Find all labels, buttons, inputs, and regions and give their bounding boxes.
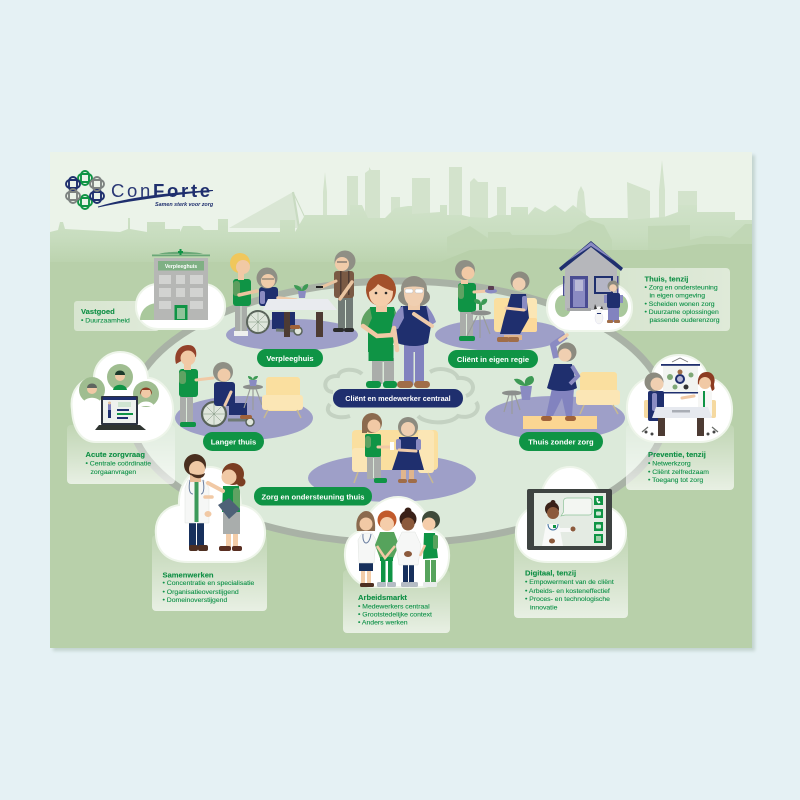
label: Langer thuis xyxy=(203,432,264,451)
Arbeidsmarkt heading: Arbeidsmarkt xyxy=(358,593,407,602)
icon: laptop xyxy=(95,396,146,430)
Arbeidsmarkt list: • Grootstedelijke context xyxy=(358,612,432,618)
Digitaal heading: Digitaal, tenzij xyxy=(525,568,576,578)
panel: Preventie, tenzij xyxy=(626,355,734,490)
scene: Cliënt in eigen regie xyxy=(455,260,537,342)
Vastgoed list: • Duurzaamheid xyxy=(81,318,130,324)
poster sky xyxy=(50,152,752,648)
Preventie cloud xyxy=(627,355,732,442)
icon: presentation screen xyxy=(661,358,700,394)
label: Cliënt en medewerker centraal: Cliënt en medewerker centraal xyxy=(345,394,451,403)
Samenwerken list xyxy=(162,580,254,604)
Acute list: • Centrale coördinatie xyxy=(86,460,151,468)
icon: nursing home building xyxy=(152,249,210,320)
disc: Verpleeghuis xyxy=(226,319,358,351)
man standing xyxy=(316,250,356,332)
panel: Vastgoed xyxy=(74,249,225,331)
Samenwerken heading: Samenwerken xyxy=(162,570,214,580)
Preventie card xyxy=(626,425,734,490)
label: Thuis zonder zorg: Thuis zonder zorg xyxy=(528,437,594,446)
Acute list: zorgaanvragen xyxy=(90,469,136,476)
background clouds xyxy=(325,369,478,422)
Arbeidsmarkt list: • Anders werken xyxy=(358,620,408,626)
Digitaal cloud xyxy=(516,467,626,562)
Digitaal list: • Proces- en technologische xyxy=(525,596,610,603)
person exercising xyxy=(541,335,578,421)
carer xyxy=(362,413,394,483)
Preventie list: • Netwerkzorg xyxy=(648,460,691,468)
speech bubble xyxy=(561,498,592,516)
resident with dog xyxy=(594,280,623,324)
Acute heading: Acute zorgvraag xyxy=(86,450,145,459)
nurse with folder xyxy=(208,463,246,551)
label: Verpleeghuis xyxy=(257,349,323,367)
label: Verpleeghuis: Verpleeghuis xyxy=(266,354,314,363)
label: Zorg en ondersteuning thuis xyxy=(254,487,372,506)
call icons xyxy=(594,496,603,543)
Arbeidsmarkt list: • Medewerkers centraal xyxy=(358,604,430,610)
Thuis list: • Zorg en ondersteuning xyxy=(644,284,718,292)
scene: Verpleeghuis xyxy=(230,250,356,337)
client in wheelchair xyxy=(202,362,254,426)
Vastgoed card xyxy=(74,301,159,331)
Digitaal list: • Arbeids- en kosteneffectief xyxy=(525,588,610,595)
Thuis list: in eigen omgeving xyxy=(650,292,705,300)
Samenwerken card xyxy=(152,535,267,611)
logo xyxy=(66,171,214,209)
doctor with dark skin xyxy=(396,508,421,587)
scene: Langer thuis xyxy=(175,345,303,427)
central circular path xyxy=(130,281,666,543)
yellow sofa xyxy=(352,430,438,483)
label: Langer thuis: Langer thuis xyxy=(211,437,256,446)
label: Thuis zonder zorg xyxy=(519,432,603,451)
Arbeidsmarkt card xyxy=(343,570,450,633)
table with plant xyxy=(263,284,337,337)
Thuis cloud xyxy=(547,284,632,331)
seated client xyxy=(497,272,530,342)
panel: Acute zorgvraag xyxy=(67,352,175,484)
Thuis list: • Duurzame oplossingen xyxy=(644,309,719,316)
doctor xyxy=(184,454,212,551)
four care workers xyxy=(356,508,440,587)
scene: Zorg en ondersteuning thuis xyxy=(352,413,438,483)
label: Cliënt in eigen regie: Cliënt in eigen regie xyxy=(457,355,529,364)
Preventie list xyxy=(648,460,709,484)
Digitaal list xyxy=(525,579,614,612)
icon: house xyxy=(555,241,628,317)
Samenwerken list: • Organisatieoverstijgend xyxy=(162,589,239,596)
Thuis list: passende ouderenzorg xyxy=(650,317,720,324)
carer with red hair xyxy=(375,510,399,587)
logo mark xyxy=(66,171,104,209)
logo swoosh xyxy=(98,190,213,207)
disc: Langer thuis xyxy=(175,396,313,440)
carer with blond hair xyxy=(230,253,257,336)
Thuis list xyxy=(644,284,720,324)
label: Cliënt in eigen regie xyxy=(448,350,538,368)
yellow armchair xyxy=(494,298,537,332)
scene: Thuis zonder zorg xyxy=(502,335,620,429)
doctor with brown hair xyxy=(356,511,376,587)
logo wordmark: ConForte xyxy=(111,180,213,201)
carer: auburn hair xyxy=(361,274,402,388)
Acute list xyxy=(86,460,151,476)
panel: Samenwerken xyxy=(152,454,267,611)
Preventie heading: Preventie, tenzij xyxy=(648,450,706,459)
Digitaal list: innovatie xyxy=(530,604,558,612)
logo tagline: Samen sterk voor zorg xyxy=(155,202,214,208)
yellow armchair xyxy=(262,377,303,418)
Arbeidsmarkt cloud xyxy=(345,497,449,587)
Thuis heading: Thuis, tenzij xyxy=(644,274,688,284)
skyline xyxy=(50,160,752,648)
Acute cloud xyxy=(72,352,173,442)
disc: Cliënt in eigen regie xyxy=(435,319,565,351)
label: Zorg en ondersteuning thuis: Zorg en ondersteuning thuis xyxy=(262,492,364,501)
meeting table with two people xyxy=(642,372,718,436)
poster shadow xyxy=(53,155,755,651)
panel: Thuis, tenzij xyxy=(547,241,730,331)
client in wheelchair xyxy=(247,268,302,335)
side table and plant xyxy=(502,376,534,414)
icon: tablet video call xyxy=(527,489,612,550)
client xyxy=(392,417,424,483)
doctor on screen xyxy=(542,500,576,546)
Thuis list: • Scheiden wonen zorg xyxy=(644,301,715,308)
Digitaal list: • Empowerment van de cliënt xyxy=(525,579,614,586)
small table xyxy=(467,299,491,338)
Thuis card xyxy=(620,268,730,331)
carer with dark hair xyxy=(420,511,440,587)
carer with cup xyxy=(455,260,497,341)
carer xyxy=(175,345,213,427)
disc: Thuis zonder zorg xyxy=(485,396,625,440)
Preventie list: • Cliënt zelfredzaam xyxy=(648,469,709,476)
Preventie list: • Toegang tot zorg xyxy=(648,477,703,484)
Samenwerken list: • Concentratie en specialisatie xyxy=(162,580,254,587)
Vastgoed cloud xyxy=(136,284,225,329)
icon: three care professionals xyxy=(79,364,159,407)
Vastgoed heading: Vastgoed xyxy=(81,307,115,316)
Acute card xyxy=(67,425,175,484)
yellow armchair xyxy=(576,372,620,414)
Erasmus bridge xyxy=(229,192,307,228)
icon: nursing home building: Verpleeghuis xyxy=(165,264,197,270)
yellow mat xyxy=(523,416,597,429)
Samenwerken list: • Domeinoverstijgend xyxy=(162,597,227,604)
Arbeidsmarkt list xyxy=(358,604,432,626)
Digitaal card xyxy=(514,535,628,618)
panel: Arbeidsmarkt xyxy=(343,497,450,633)
label: Cliënt en medewerker centraal xyxy=(333,389,463,408)
disc: Zorg en ondersteuning thuis xyxy=(308,454,476,502)
icon: green bush xyxy=(140,303,158,320)
client: grey hair xyxy=(392,276,436,388)
scene: Cliënt en medewerker centraal xyxy=(361,274,436,388)
panel: Digitaal, tenzij xyxy=(514,467,628,618)
table and plant xyxy=(243,376,263,410)
Samenwerken cloud xyxy=(156,467,265,562)
